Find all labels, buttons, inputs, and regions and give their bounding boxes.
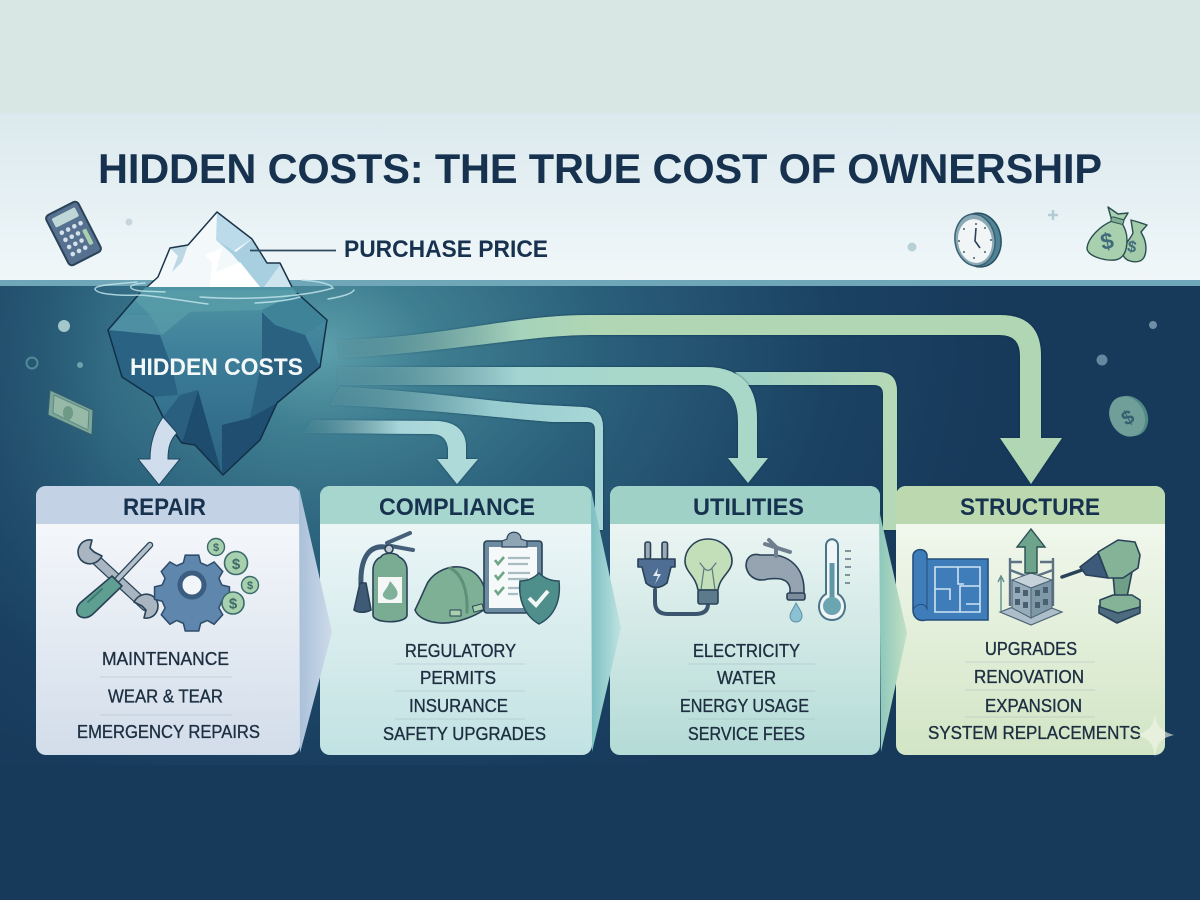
- compliance heading: COMPLIANCE: [379, 494, 535, 521]
- icon: water drop: [790, 603, 802, 622]
- bottom band: [0, 765, 1200, 900]
- utilities list: [680, 640, 815, 744]
- bubbles right: [1096, 321, 1157, 366]
- utilities list: ELECTRICITY: [693, 640, 800, 661]
- chevron: repair to compliance: [299, 488, 332, 753]
- decorative plus: [1048, 210, 1058, 220]
- arrow: to compliance: [303, 420, 478, 484]
- card: compliance: [320, 486, 592, 755]
- chevron: utilities to structure: [879, 510, 907, 752]
- icon: wrench and screwdriver: [77, 540, 158, 618]
- iceberg: [95, 212, 354, 475]
- repair list: WEAR & TEAR: [108, 686, 223, 706]
- waterline: [0, 280, 1200, 286]
- utilities list: WATER: [717, 667, 776, 688]
- icon: light bulb: [685, 539, 732, 604]
- leader line: [250, 250, 336, 252]
- compliance list: REGULATORY: [405, 640, 516, 661]
- repair list: EMERGENCY REPAIRS: [77, 721, 260, 742]
- arrow: thin feed to utilities: [330, 387, 603, 530]
- icon: blueprint: [913, 550, 988, 620]
- arrow: to utilities: [338, 367, 768, 483]
- icon: shield: [520, 573, 559, 624]
- structure list: [928, 638, 1141, 743]
- utilities list: ENERGY USAGE: [680, 695, 809, 716]
- water ripples: [95, 280, 354, 304]
- repair list: MAINTENANCE: [102, 648, 229, 669]
- arrow: to repair: [138, 417, 180, 485]
- compliance list: PERMITS: [420, 667, 496, 688]
- icon: plug and cord: [638, 542, 708, 614]
- icon: floating banknote: [48, 390, 93, 435]
- utilities list: SERVICE FEES: [688, 723, 805, 744]
- utilities heading: UTILITIES: [693, 494, 804, 521]
- label: purchase price: PURCHASE PRICE: [344, 236, 548, 263]
- icon: coins: [208, 538, 258, 614]
- icon: cordless drill: [1062, 540, 1140, 623]
- deep water panel: [0, 286, 1200, 766]
- title: HIDDEN COSTS: THE TRUE COST OF OWNERSHIP: [98, 145, 1102, 192]
- utilities header band: [610, 486, 880, 524]
- structure body: [896, 486, 1165, 755]
- icon: faucet: [746, 540, 805, 600]
- card: repair: [36, 486, 300, 755]
- repair list: [77, 648, 260, 742]
- compliance body: [320, 486, 592, 755]
- top band: [0, 0, 1200, 114]
- structure heading: STRUCTURE: [960, 494, 1100, 521]
- icon: coin: $: [1118, 406, 1138, 431]
- repair body: [36, 486, 300, 755]
- bubble: [126, 218, 132, 226]
- icon: calculator: [45, 200, 102, 267]
- icon: coins: $: [229, 596, 238, 612]
- structure list: RENOVATION: [974, 666, 1084, 687]
- label: hidden costs: HIDDEN COSTS: [130, 354, 303, 381]
- icon: coin: [1102, 389, 1155, 444]
- structure list: UPGRADES: [985, 638, 1077, 659]
- icon: money bags: [1087, 207, 1147, 262]
- arrow: to structure: [338, 315, 1062, 484]
- icon: money bags: $: [1126, 238, 1138, 257]
- icon: building with up arrow: [998, 529, 1062, 625]
- icon: hard hat: [415, 567, 492, 623]
- dot: [908, 242, 916, 252]
- icon: clipboard: [484, 532, 542, 613]
- chevron: compliance to utilities: [591, 490, 621, 752]
- structure header band: [896, 486, 1165, 524]
- iceberg tip above water: [147, 212, 292, 287]
- icon: coins: $: [232, 556, 241, 573]
- iceberg underwater mass: [108, 287, 327, 475]
- arrow: thin feed to structure: [735, 372, 897, 530]
- compliance list: [383, 640, 546, 744]
- sparkle watermark: [1136, 714, 1174, 757]
- structure list: SYSTEM REPLACEMENTS: [928, 722, 1141, 743]
- icon: coins: $: [247, 580, 253, 592]
- compliance header band: [320, 486, 592, 524]
- card: structure: [896, 486, 1165, 755]
- card: utilities: [610, 486, 880, 755]
- compliance list: INSURANCE: [409, 695, 508, 716]
- icon: money bags: $: [1098, 227, 1116, 255]
- compliance list: SAFETY UPGRADES: [383, 723, 546, 744]
- icon: gear: [155, 555, 229, 631]
- icon: fire extinguisher: [354, 533, 413, 622]
- utilities body: [610, 486, 880, 755]
- icon: thermometer: [819, 539, 851, 620]
- icon: coins: $: [213, 542, 219, 554]
- structure list: EXPANSION: [985, 695, 1082, 716]
- bubbles left: [26, 320, 83, 368]
- repair heading: REPAIR: [123, 494, 206, 521]
- repair header band: [36, 486, 300, 524]
- sky panel: [0, 113, 1200, 281]
- icon: clock: [952, 210, 1005, 270]
